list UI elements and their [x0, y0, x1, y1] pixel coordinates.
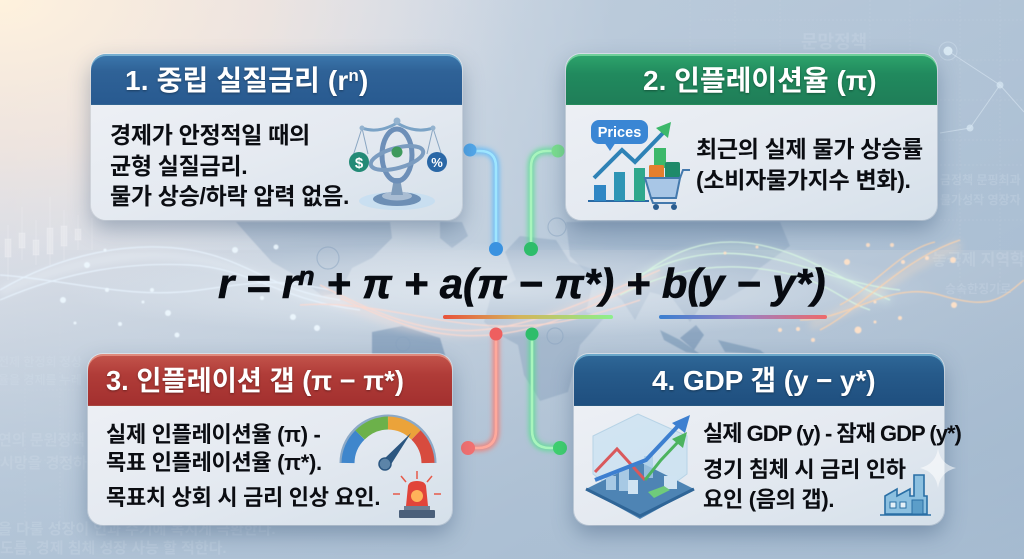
faint background text: 금정책 문핑최과	[940, 172, 1021, 187]
icon: factory	[880, 474, 931, 516]
icon: inflation gauge	[340, 414, 436, 471]
text: panel 2 body: 최근의 실제 물가 상승률	[696, 136, 923, 162]
heading 3	[88, 354, 452, 406]
network nodes	[939, 42, 1024, 133]
text: panel 1 body: 경제가 안정적일 때의	[110, 122, 310, 148]
panel 4: GDP gap	[574, 354, 944, 525]
text: panel 3 body	[106, 422, 380, 510]
panel 1: neutral real rate	[91, 54, 462, 220]
faint background text: 연의 문원정책	[0, 432, 85, 449]
text: panel 4 body: 요인 (음의 갭).	[703, 487, 834, 512]
faint dollar coins on map	[317, 218, 566, 351]
heading 4	[574, 354, 944, 406]
formula: r = r	[218, 260, 298, 307]
light waves	[0, 240, 1024, 336]
faint background text: 놓극제 지역학	[932, 251, 1024, 269]
faint background text: 율을 경제를 누레	[0, 372, 82, 387]
text: panel 2 body: (소비자물가지수 변화).	[696, 167, 911, 193]
candlesticks	[5, 197, 92, 280]
heading 1	[91, 54, 462, 105]
text: panel 4 body: 경기 침체 시 금리 인하	[703, 457, 906, 482]
formula: + π + a(π − π*) + b(y − y*)	[315, 260, 826, 307]
faint background text: 도름, 경제 침체 성장 사능 할 적한다.	[0, 540, 227, 557]
icon: GDP chart over city	[585, 414, 695, 519]
text: panel 3 body: 목표 인플레이션율 (π*).	[106, 450, 322, 475]
faint background text: 시망을 경정하	[0, 455, 87, 472]
connector: formula to panel 4	[526, 328, 567, 455]
panel 3: inflation gap	[88, 354, 452, 525]
faint background text: 전제 한정회 정상	[0, 354, 82, 369]
faint background text: 승속한징기로	[945, 281, 1011, 296]
icon: balance scale with gyroscope: %	[431, 155, 443, 170]
icon: red siren	[393, 471, 441, 518]
text: panel 2 body	[696, 136, 923, 193]
faint background text: 을 다룰 성장이 인과 수기에 목치게 극환한다.	[0, 521, 276, 538]
heading 2: 2. 인플레이션율 (π)	[643, 65, 877, 96]
icon: prices chart and shopping cart: Prices	[598, 125, 641, 141]
faint background text: 문망정책	[801, 32, 867, 52]
text: panel 4 body: 실제 GDP (y) - 잠재 GDP (y*)	[703, 421, 961, 446]
faint background text: 물가성작 영장자	[940, 192, 1021, 207]
icon: prices chart and shopping cart	[588, 120, 690, 210]
text: panel 1 body: 균형 실질금리.	[110, 153, 247, 179]
connector: panel 2 to formula	[524, 144, 564, 256]
text: panel 4 body	[703, 421, 961, 512]
underline: GDP gap term	[659, 315, 827, 319]
sparkles	[60, 244, 320, 338]
icon: balance scale with gyroscope: $	[355, 155, 364, 172]
text: panel 1 body: 물가 상승/하락 압력 없음.	[110, 183, 349, 209]
heading 2	[566, 54, 937, 105]
heading 1: 1. 중립 실질금리 (rn)	[125, 65, 368, 96]
connector: panel 1 to formula	[464, 144, 503, 256]
text: panel 1 body	[110, 122, 349, 209]
connector: formula to panel 3	[461, 328, 502, 455]
formula: n	[298, 261, 315, 291]
icon: sparkle star	[920, 450, 956, 487]
icon: balance scale with gyroscope	[349, 118, 447, 210]
panel 2: inflation rate	[566, 54, 937, 220]
text: panel 3 body: 실제 인플레이션율 (π) -	[106, 422, 321, 447]
text: panel 3 body: 목표치 상회 시 금리 인상 요인.	[106, 485, 380, 510]
world map	[236, 222, 790, 401]
heading 3: 3. 인플레이션 갭 (π − π*)	[106, 365, 404, 396]
underline: inflation gap term	[443, 315, 613, 319]
heading 4: 4. GDP 갭 (y − y*)	[652, 365, 876, 396]
